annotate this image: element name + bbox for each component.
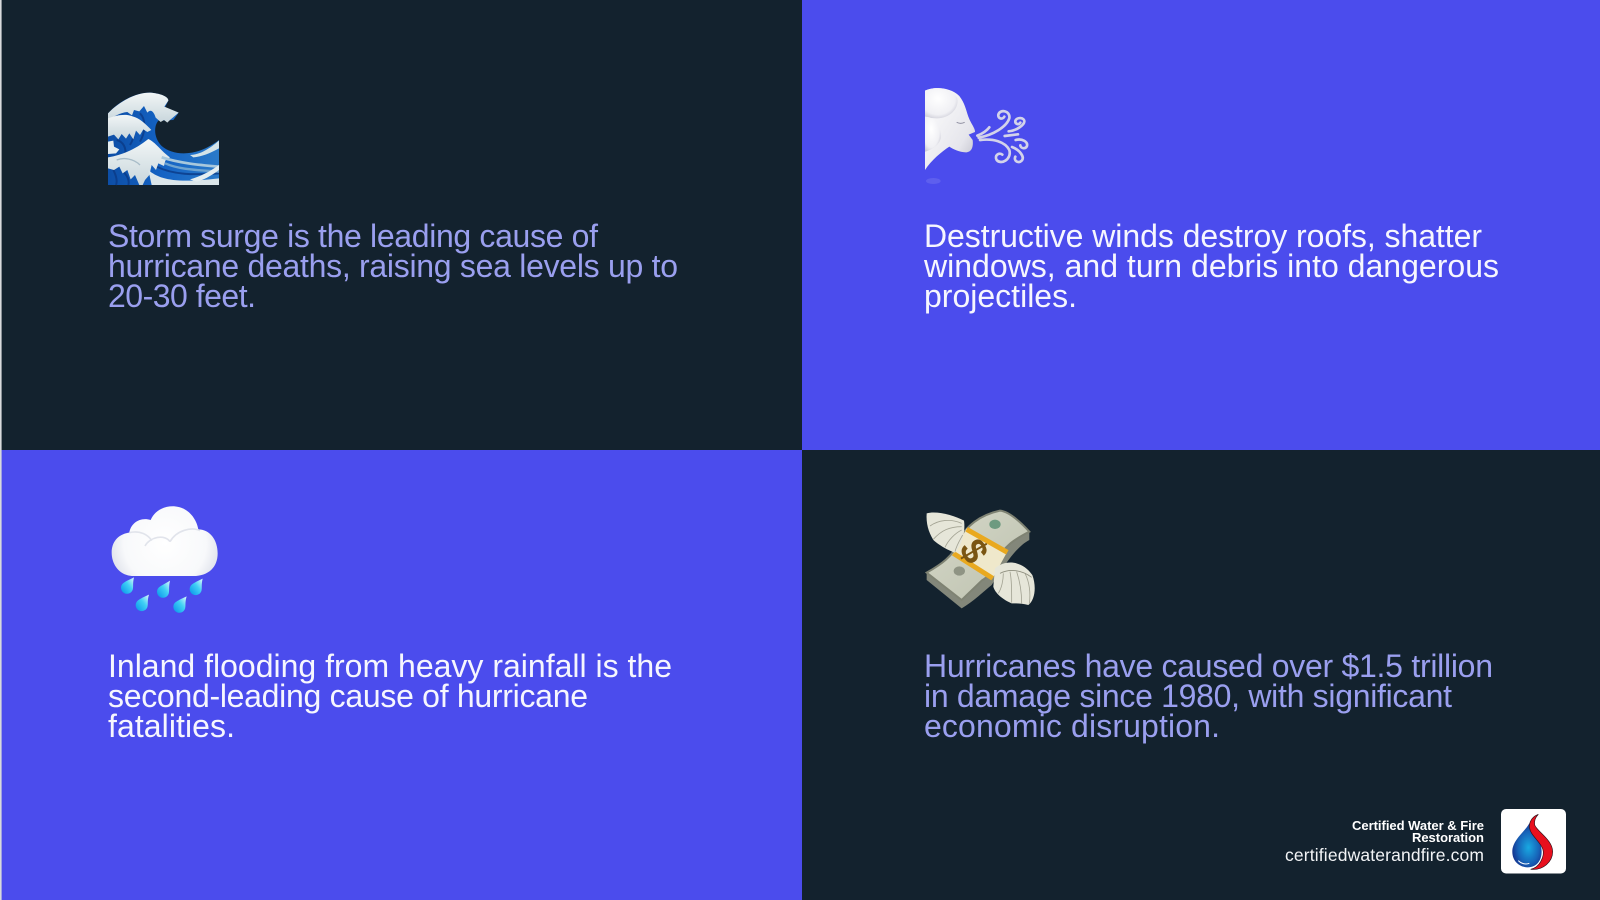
icon: money with wings [927,511,1035,608]
text: inland flooding statement: fatalities. [108,708,235,744]
text: destructive winds statement: windows, and turn debris into dangerous [923,248,1499,284]
icon: water wave [108,93,219,185]
text: storm surge statement: hurricane deaths, raising sea levels up to [108,248,678,284]
logo: water drop and flame [1501,809,1566,874]
text: inland flooding statement [108,648,672,744]
left wing [927,513,964,553]
text: destructive winds statement: projectiles. [924,278,1077,314]
icon: cloud with rain [112,506,218,613]
text: destructive winds statement [923,218,1499,314]
company name [1352,818,1484,845]
icon: money with wings: $ [951,532,997,570]
rain drops [121,577,203,613]
footer branding [1285,809,1566,874]
text: inland flooding statement: Inland flooding from heavy rainfall is the [108,648,672,684]
company name: Certified Water & Fire [1352,818,1484,833]
panel: inland flooding [0,450,802,900]
text: economic damage statement: Hurricanes have caused over $1.5 trillion [924,648,1493,684]
company name: Restoration [1412,830,1484,845]
panel: storm surge [0,0,802,450]
left edge strip [0,0,2,900]
text: economic damage statement [924,648,1493,744]
text: storm surge statement: Storm surge is the leading cause of [108,218,598,254]
icon: wind face [925,88,1027,184]
text: storm surge statement [108,218,678,314]
text: economic damage statement: economic disruption. [924,708,1220,744]
text: destructive winds statement: Destructive winds destroy roofs, shatter [924,218,1482,254]
text: storm surge statement: 20-30 feet. [108,278,256,314]
panel: destructive winds [802,0,1600,450]
text: inland flooding statement: second-leading cause of hurricane [108,678,588,714]
right wing [993,563,1035,605]
website url: certifiedwaterandfire.com [1285,845,1484,865]
panel: economic damage [802,450,1600,900]
text: economic damage statement: in damage since 1980, with significant [924,678,1452,714]
